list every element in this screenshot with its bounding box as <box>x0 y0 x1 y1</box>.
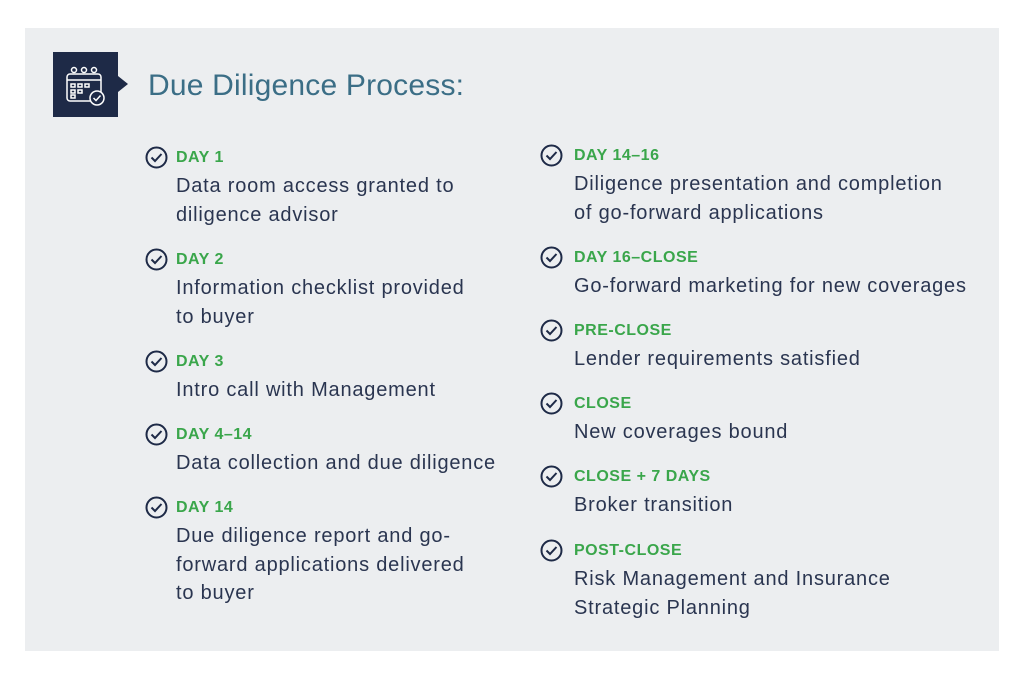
item: Day 1: Data room access granted to <box>176 175 454 197</box>
item: Day 14: DAY 14 <box>176 499 233 516</box>
item: Close + 7 days <box>540 466 733 516</box>
item: Day 16-close: Go-forward marketing for new coverages <box>574 275 967 297</box>
item: Close + 7 days: Broker transition <box>574 494 733 516</box>
item: Day 3: Intro call with Management <box>176 379 436 401</box>
item: Day 1 <box>146 146 454 226</box>
item: Day 16-close <box>540 246 967 297</box>
title: Due Diligence Process: <box>148 69 464 102</box>
item: Pre-close: PRE-CLOSE <box>574 322 672 339</box>
item: Post-close: POST-CLOSE <box>574 542 682 559</box>
item: Close: CLOSE <box>574 395 632 412</box>
item: Day 14-16: of go-forward applications <box>574 202 824 224</box>
item: Day 4-14: Data collection and due diligence <box>176 452 496 474</box>
item: Day 2: DAY 2 <box>176 251 224 268</box>
item: Day 1: diligence advisor <box>176 204 339 226</box>
item: Day 3: DAY 3 <box>176 353 224 370</box>
item: Day 2 <box>146 248 465 328</box>
item: Close <box>540 392 788 443</box>
item: Day 14: Due diligence report and go- <box>176 525 451 547</box>
item: Day 14: forward applications delivered <box>176 554 465 576</box>
item: Close + 7 days: CLOSE + 7 DAYS <box>574 468 711 485</box>
item: Post-close: Risk Management and Insurance <box>574 568 891 590</box>
item: Day 1: DAY 1 <box>176 149 224 166</box>
item: Pre-close: Lender requirements satisfied <box>574 348 861 370</box>
item: Pre-close <box>540 320 861 370</box>
item: Day 14-16: DAY 14–16 <box>574 147 659 164</box>
icon: calendar <box>53 52 128 117</box>
item: Day 4-14: DAY 4–14 <box>176 426 252 443</box>
item: Post-close <box>540 540 891 618</box>
item: Post-close: Strategic Planning <box>574 596 751 618</box>
item: Day 3 <box>146 350 436 401</box>
item: Day 14-16 <box>540 144 943 224</box>
item: Close: New coverages bound <box>574 421 788 443</box>
item: Day 2: Information checklist provided <box>176 277 465 299</box>
item: Day 14-16: Diligence presentation and completion <box>574 173 943 195</box>
item: Day 2: to buyer <box>176 306 255 328</box>
item: Day 4-14 <box>146 424 496 474</box>
item: Day 14 <box>146 496 465 604</box>
item: Day 14: to buyer <box>176 582 255 604</box>
item: Day 16-close: DAY 16–CLOSE <box>574 249 698 266</box>
